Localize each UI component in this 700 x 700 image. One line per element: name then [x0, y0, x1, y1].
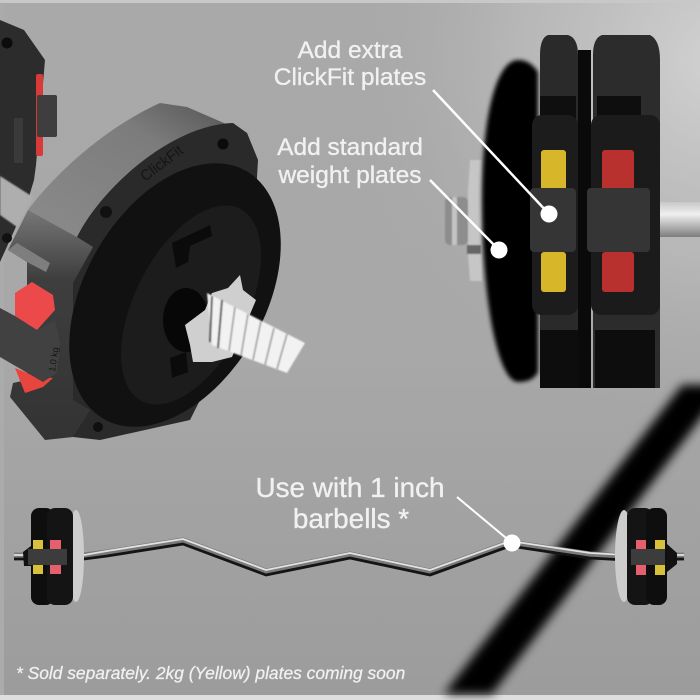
dark clip bars: [530, 188, 650, 252]
hinge tab: [8, 243, 50, 272]
black standard weight plate: [26, 126, 324, 464]
callout: 1 inch barbells: [255, 472, 520, 552]
leader line and dot: [433, 90, 558, 222]
grey clip bar with 1.0 kg label: [0, 308, 60, 382]
callout: standard weight plates: [277, 134, 508, 258]
nut and collar: [445, 160, 482, 281]
chrome star collar: [185, 275, 256, 362]
rear plate with clip: [0, 20, 57, 262]
leader line and dot: [457, 497, 520, 552]
red buttons: [602, 150, 634, 292]
second ClickFit plate: [591, 35, 660, 388]
label: Add extra: [298, 37, 403, 64]
left silver disc: [68, 510, 84, 602]
left plates: [23, 508, 73, 605]
first ClickFit plate: [532, 35, 578, 388]
label: weight plates: [277, 162, 422, 189]
footnote: * Sold separately. 2kg (Yellow) plates coming soon: [16, 663, 405, 683]
right side view plates: [445, 35, 700, 388]
embossed plate marks: [170, 225, 212, 378]
right plates: [627, 508, 677, 605]
ClickFit plate light edge: [28, 103, 258, 260]
yellow buttons: [541, 150, 566, 292]
plate mounting holes: [93, 138, 228, 432]
red clip button: [15, 282, 55, 393]
left close-up dumbbell: [0, 20, 324, 464]
label: Add standard: [277, 134, 423, 161]
label: barbells *: [293, 503, 409, 534]
gap between plates: [578, 50, 591, 388]
plate inner disc: [92, 183, 290, 427]
leader line and dot: [430, 180, 508, 258]
knurled bar: [0, 176, 33, 227]
ClickFit plate lower grey block: [8, 210, 93, 440]
right silver disc: [615, 510, 633, 602]
diagonal black band: [444, 385, 700, 694]
label: Use with 1 inch: [255, 472, 445, 503]
steel bar: [655, 202, 700, 237]
black standard weight plate: [482, 60, 538, 382]
callout: extra ClickFit plates: [274, 37, 558, 222]
grey clip bar with 1.0 kg label: 1.0 kg: [47, 347, 60, 372]
label: ClickFit plates: [274, 64, 426, 91]
ClickFit plate front: [60, 123, 258, 440]
curl bar: [14, 539, 684, 575]
threaded chrome sleeve: [207, 293, 305, 373]
hub: [163, 288, 209, 352]
lower barbell: [14, 508, 684, 605]
ClickFit embossed label: ClickFit: [137, 142, 187, 185]
